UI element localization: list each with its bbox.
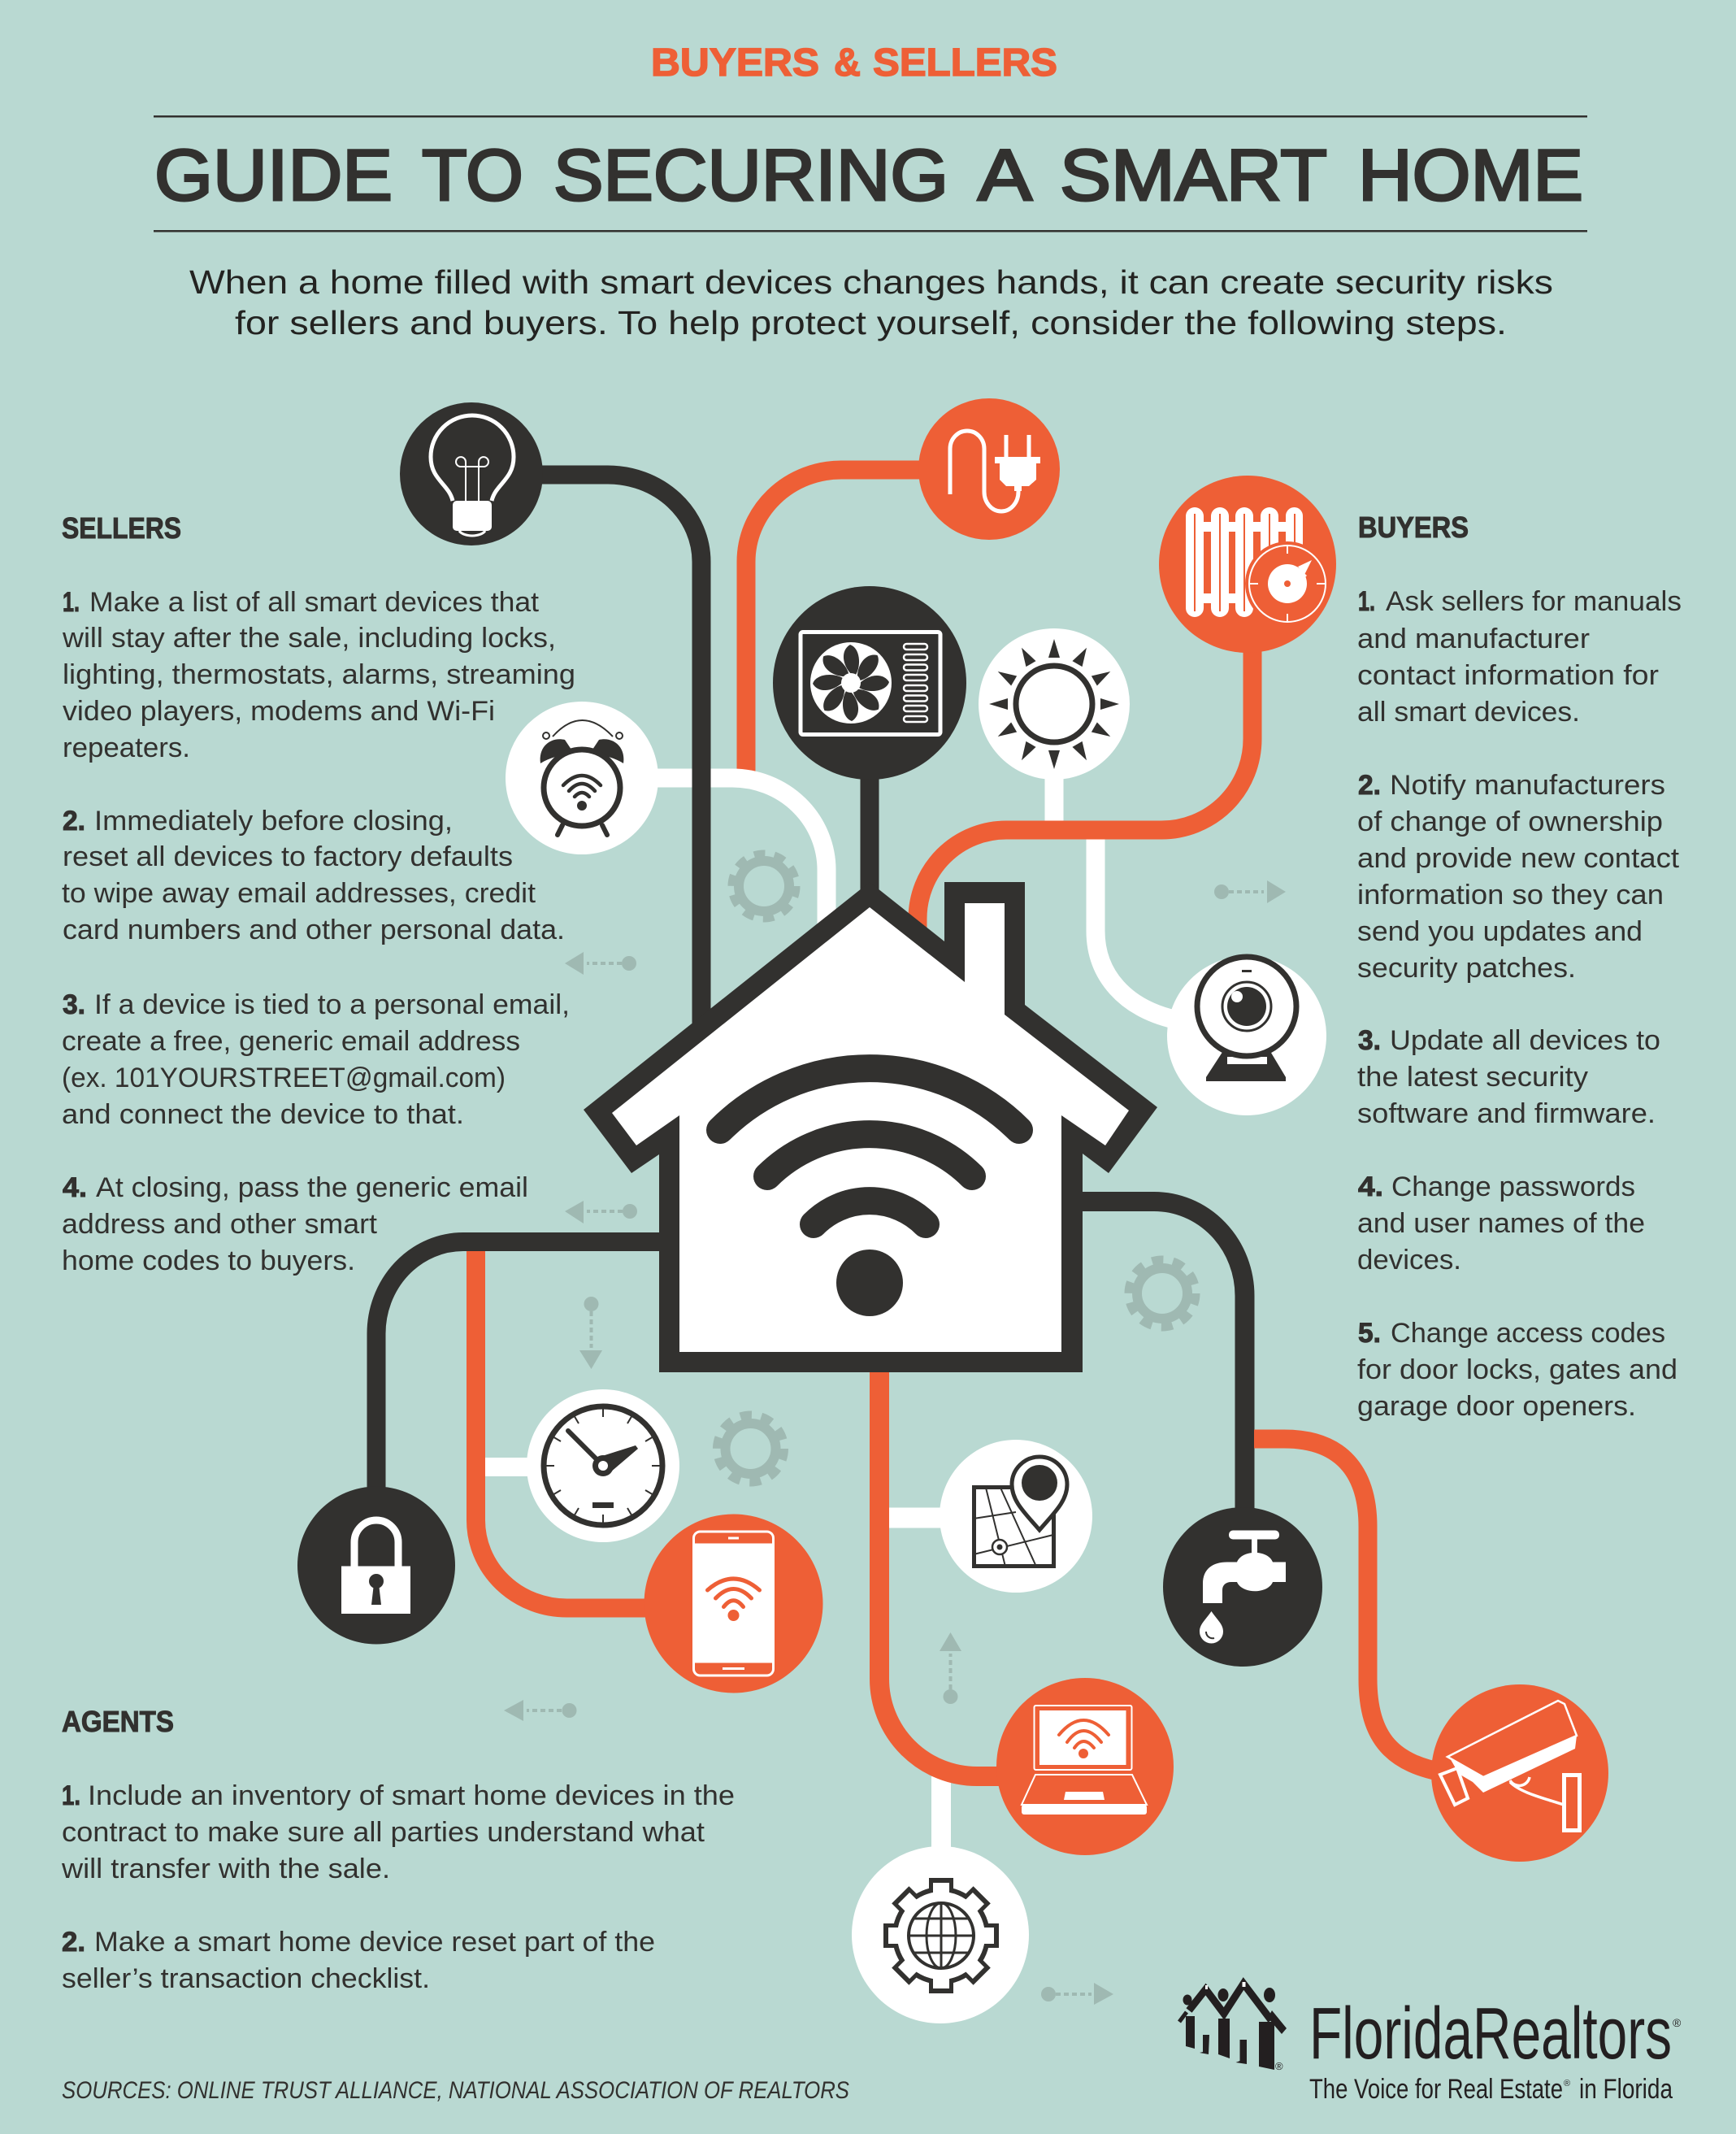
panel: buyers text: all smart devices. (1357, 697, 1580, 728)
panel: buyers text: for door locks, gates and (1357, 1354, 1677, 1385)
intro text (189, 263, 1553, 341)
eyebrow heading: SELLERS (873, 41, 1057, 85)
panel: buyers text: 3. (1358, 1025, 1381, 1056)
panel: buyers text: 4. (1358, 1171, 1383, 1202)
title: GUIDE (154, 134, 393, 215)
panel: sellers text (62, 511, 575, 1276)
title: SMART (1060, 134, 1327, 215)
panel: buyers text: devices. (1357, 1245, 1461, 1276)
panel: buyers text: of change of ownership (1357, 806, 1663, 837)
panel: agents text: seller’s transaction checklist. (62, 1963, 430, 1994)
logo: Florida Realtors: ® (1275, 2060, 1283, 2072)
panel: sellers text: 2. (63, 806, 85, 837)
panel: buyers text: security patches. (1357, 953, 1576, 984)
panel: sellers text: repeaters. (63, 732, 190, 763)
icon: laptop (996, 1678, 1174, 1855)
icon: sun (979, 628, 1130, 780)
logo: Florida Realtors: ® (1673, 2016, 1682, 2029)
panel: agents text: 2. (62, 1927, 85, 1958)
icon: air conditioner (773, 586, 966, 780)
panel: buyers text: Change access codes (1391, 1318, 1665, 1349)
title: HOME (1358, 134, 1583, 215)
panel: sellers text: home codes to buyers. (62, 1245, 355, 1276)
logo: Florida Realtors (1179, 1982, 1682, 2105)
panel: buyers text: Ask sellers for manuals (1386, 586, 1682, 617)
icon: faucet (1163, 1507, 1322, 1667)
panel: sellers text: to wipe away email addresses, credit (62, 878, 536, 909)
logo: Florida Realtors: ® (1564, 2079, 1570, 2088)
panel: sellers text: 4. (63, 1172, 87, 1203)
panel: agents text: Make a smart home device reset part of the (94, 1927, 655, 1958)
icon: padlock (297, 1486, 455, 1644)
panel: agents text: Include an inventory of smart home devices in the (88, 1780, 735, 1811)
panel: buyers text: 1. (1358, 586, 1375, 617)
panel: buyers text: 2. (1358, 770, 1381, 801)
panel: buyers text: send you updates and (1357, 916, 1643, 947)
panel: sellers text: address and other smart (62, 1209, 378, 1240)
panel: sellers text: lighting, thermostats, alarms, streaming (63, 659, 575, 690)
panel: sellers text: 1. (63, 587, 80, 618)
panel: buyers text (1357, 511, 1682, 1422)
connector lines (376, 470, 1447, 1935)
panel: sellers text: reset all devices to factory defaults (63, 841, 513, 872)
icon: webcam (1167, 956, 1326, 1115)
icon: map with pin (940, 1440, 1092, 1593)
panel: buyers text: information so they can (1357, 880, 1664, 911)
panel: sellers text: Immediately before closing, (94, 806, 453, 837)
panel: buyers text: Notify manufacturers (1390, 770, 1665, 801)
logo: Florida Realtors: The Voice for Real Estate (1309, 2074, 1563, 2105)
panel: buyers text: Update all devices to (1390, 1025, 1660, 1056)
panel: sellers text: will stay after the sale, including locks, (62, 623, 556, 654)
icon: background gears (717, 854, 1196, 1482)
logo: Florida Realtors: in Florida (1579, 2074, 1673, 2105)
panel: buyers text: garage door openers. (1357, 1391, 1636, 1422)
panel: sellers text: SELLERS (62, 511, 181, 545)
panel: sellers text: 3. (63, 989, 85, 1020)
icon: globe gear (852, 1846, 1029, 2023)
panel: sellers text: (ex. 101YOURSTREET@gmail.com) (62, 1063, 506, 1093)
intro text: for sellers and buyers. To help protect yourself, consider the following steps. (235, 304, 1507, 341)
icon: security camera (1431, 1684, 1608, 1862)
title: A (978, 134, 1033, 215)
panel: buyers text: contact information for (1357, 660, 1659, 691)
panel: buyers text: software and firmware. (1357, 1098, 1656, 1129)
eyebrow heading: BUYERS (651, 41, 819, 85)
panel: sellers text: create a free, generic email address (62, 1026, 520, 1057)
icon: smartphone (644, 1514, 822, 1693)
intro text: When a home filled with smart devices changes hands, it can create security risks (189, 263, 1553, 301)
panel: buyers text: BUYERS (1358, 511, 1469, 544)
title: SECURING (553, 134, 948, 215)
panel: buyers text: and user names of the (1357, 1208, 1645, 1239)
panel: sellers text: card numbers and other personal data. (63, 915, 565, 945)
panel: agents text: will transfer with the sale. (61, 1854, 390, 1884)
icon: alarm clock (506, 702, 658, 854)
panel: buyers text: and provide new contact (1357, 843, 1680, 874)
panel: buyers text: and manufacturer (1357, 624, 1590, 654)
panel: agents text: contract to make sure all parties understand what (62, 1817, 705, 1848)
house with wi-fi symbol (584, 882, 1157, 1372)
icon: clock (527, 1389, 679, 1542)
title: TO (422, 134, 523, 215)
arrows: dashed direction markers (504, 880, 1286, 2005)
panel: sellers text: Make a list of all smart devices that (89, 587, 540, 618)
panel: buyers text: 5. (1358, 1318, 1381, 1349)
eyebrow heading (651, 41, 1057, 85)
icon: light bulb (400, 402, 543, 545)
panel: sellers text: At closing, pass the generic email (96, 1172, 528, 1203)
eyebrow heading: & (834, 41, 861, 85)
panel: agents text: 1. (62, 1780, 80, 1811)
logo mark (1179, 1982, 1287, 2070)
sources note: SOURCES: ONLINE TRUST ALLIANCE, NATIONAL ASSOCIATION OF REALTORS (62, 2077, 849, 2104)
panel: buyers text: the latest security (1357, 1062, 1588, 1093)
icon: radiator with dial (1159, 476, 1336, 653)
panel: buyers text: Change passwords (1391, 1171, 1635, 1202)
panel: sellers text: If a device is tied to a personal email, (94, 989, 570, 1020)
title (154, 134, 1583, 215)
panel: agents text (61, 1705, 735, 1994)
icon: power plug (918, 398, 1060, 540)
panel: sellers text: and connect the device to that. (62, 1099, 464, 1130)
panel: sellers text: video players, modems and Wi-Fi (63, 696, 495, 727)
panel: agents text: AGENTS (62, 1705, 174, 1738)
